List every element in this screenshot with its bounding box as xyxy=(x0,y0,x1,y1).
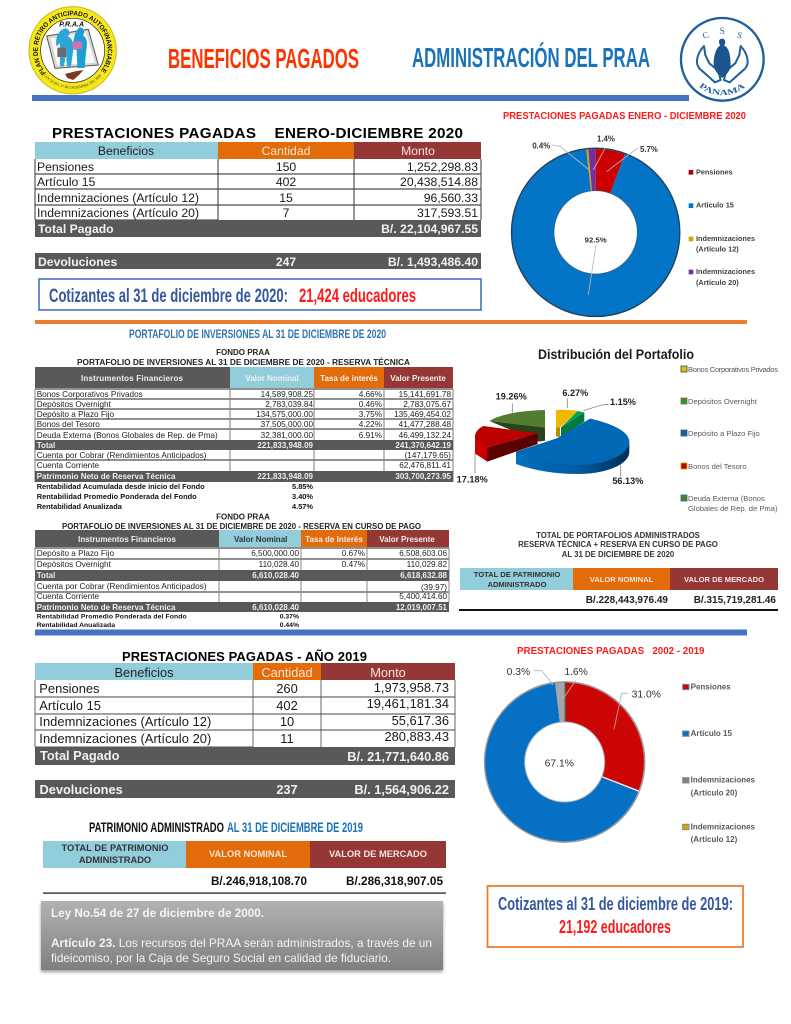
heading: table benefits 2019: PRESTACIONES PAGADAS - AÑO 2019 xyxy=(122,649,367,664)
table: reserva en curso de pago: Cuenta Corriente xyxy=(37,592,99,601)
callout: cotizantes 2020: 21,424 educadores xyxy=(299,286,416,307)
donut chart: prestaciones 2020: 92.5% xyxy=(585,236,607,245)
text box: ley 54: Ley No.54 de 27 de diciembre de 2000. xyxy=(51,907,264,920)
heading: donut 2020: PRESTACIONES PAGADAS ENERO - DICIEMBRE 2020 xyxy=(503,110,746,122)
legend: donut 2002-2019: Indemnizaciones xyxy=(691,776,756,785)
callout: cotizantes 2019 xyxy=(488,886,743,947)
table: patrimonio 2019: TOTAL DE PATRIMONIO xyxy=(62,843,168,853)
table: benefits 2020: 15 xyxy=(279,191,293,205)
table: benefits 2019: 1,973,958.73 xyxy=(374,680,449,695)
legend: donut 2020 xyxy=(689,167,755,287)
table: reserva tecnica: 241,370,642.19 xyxy=(395,441,452,450)
table: benefits 2020: Indemnizaciones (Artículo 20) xyxy=(37,206,199,220)
donut chart: prestaciones 2002-2019: 0.3% xyxy=(507,667,530,678)
row: devoluciones 2019: Devoluciones xyxy=(40,782,123,797)
table: reserva en curso de pago: 6,610,028.40 xyxy=(252,571,300,580)
table: reserva tecnica: 32,381,000.00 xyxy=(261,431,313,440)
table: benefits 2019: 10 xyxy=(280,714,294,729)
donut chart: prestaciones 2020 xyxy=(512,135,680,316)
text: rentabilidad curso de pago xyxy=(37,614,299,629)
table: patrimonio 2019: B/.286,318,907.05 xyxy=(346,876,444,888)
heading: total de portafolios administrados: AL 31 DE DICIEMBRE DE 2020 xyxy=(562,550,675,559)
logo: CSS Panama: S xyxy=(736,30,744,41)
table: reserva tecnica: 62,476,811.41 xyxy=(399,461,451,470)
logo: CSS Panama xyxy=(680,16,765,102)
donut chart: prestaciones 2020: 5.7% xyxy=(640,145,658,154)
heading: distribucion del portafolio: Distribución del Portafolio xyxy=(538,347,694,362)
row: devoluciones 2019: B/. 1,564,906.22 xyxy=(354,782,449,797)
table: reserva tecnica: 0.46% xyxy=(359,400,382,409)
table: patrimonio 2019: B/.246,918,108.70 xyxy=(211,876,307,888)
legend: donut 2020: (Artículo 20) xyxy=(696,278,739,287)
heading: table benefits 2020: PRESTACIONES PAGADAS ENERO-DICIEMBRE 2020 xyxy=(52,125,463,142)
3D pie chart: distribucion del portafolio: 6.27% xyxy=(562,388,588,398)
text: rentabilidad curso de pago: Rentabilidad Promedio Ponderada del Fondo xyxy=(37,614,187,620)
legend: distribucion del portafolio: Bonos del Tesoro xyxy=(688,462,747,471)
table: reserva tecnica: 221,833,948.09 xyxy=(257,472,314,481)
table: benefits 2019: 260 xyxy=(276,681,298,696)
logo: PRAA: PLAN DE RETIRO ANTICIPADO AUTOFINANCIABLE xyxy=(33,10,112,76)
row: devoluciones 2019 xyxy=(35,780,455,798)
table: benefits 2020: 7 xyxy=(283,206,290,220)
table: benefits 2019: 11 xyxy=(280,731,294,746)
table: reserva tecnica: Cuenta por Cobrar (Rendimientos Anticipados) xyxy=(37,451,207,460)
table: reserva tecnica: Patrimonio Neto de Reserva Técnica xyxy=(37,472,176,481)
table: reserva tecnica: 2,783,039.84 xyxy=(265,400,313,409)
table: reserva en curso de pago: Valor Nominal xyxy=(234,535,287,544)
table: reserva en curso de pago: 5,400,414.60 xyxy=(399,592,447,601)
table: patrimonio 2019 xyxy=(43,841,446,894)
table: total patrimonio 2020: VALOR DE MERCADO xyxy=(684,575,764,584)
text: rentabilidad reserva tecnica: Rentabilidad Anualizada xyxy=(37,502,123,511)
table: benefits 2020: 96,560.33 xyxy=(424,191,478,205)
text: rentabilidad curso de pago: 0.37% xyxy=(280,614,299,620)
heading: total de portafolios administrados: RESERVA TÉCNICA + RESERVA EN CURSO DE PAGO xyxy=(518,540,718,549)
table: reserva en curso de pago: Patrimonio Neto de Reserva Técnica xyxy=(37,603,176,612)
table: reserva tecnica: 3.75% xyxy=(359,410,382,419)
table: reserva en curso de pago: 0.67% xyxy=(342,549,365,558)
table: total patrimonio 2020: VALOR NOMINAL xyxy=(590,575,654,584)
table: benefits 2020: B/. 22,104,967.55 xyxy=(381,222,478,236)
table: reserva tecnica: 134,575,000.00 xyxy=(256,410,313,419)
table: reserva en curso de pago: Tasa de Interés xyxy=(305,535,363,544)
text box: ley 54: fideicomiso, por la Caja de Seguro Social en calidad de fiduciario. xyxy=(51,952,391,965)
donut chart: prestaciones 2002-2019 xyxy=(485,667,661,842)
text: rentabilidad reserva tecnica: 4.57% xyxy=(292,502,313,511)
table: reserva tecnica: 41,477,288.48 xyxy=(399,420,451,429)
table: benefits 2020: Beneficios xyxy=(98,144,154,158)
table: reserva en curso de pago: Depósito a Plazo Fijo xyxy=(37,549,115,558)
legend: donut 2020: Pensiones xyxy=(696,167,733,176)
logo: PRAA: LEY 54 DEL 27 DE DICIEMBRE DEL 2000 xyxy=(44,74,101,89)
table: total patrimonio 2020: ADMINISTRADO xyxy=(487,580,547,589)
table: benefits 2019: Artículo 15 xyxy=(39,698,101,713)
heading: total de portafolios administrados xyxy=(518,531,718,559)
table: benefits 2020: Total Pagado xyxy=(38,222,114,236)
callout: cotizantes 2019: 21,192 educadores xyxy=(559,917,671,937)
table: reserva tecnica: 46,499,132.24 xyxy=(399,431,451,440)
table: reserva tecnica: 15,141,691.78 xyxy=(399,390,451,399)
logo: CSS Panama: C xyxy=(701,29,710,41)
logo: CSS Panama: S xyxy=(720,26,725,36)
text: rentabilidad curso de pago: 0.44% xyxy=(280,622,299,629)
legend: donut 2002-2019 xyxy=(683,682,756,844)
table: reserva tecnica: 135,469,454.02 xyxy=(394,410,451,419)
legend: donut 2002-2019: (Artículo 20) xyxy=(691,788,738,797)
heading: reserva tecnica: PORTAFOLIO DE INVERSIONES AL 31 DE DICIEMBRE DE 2020 - RESERVA TÉCNICA xyxy=(77,358,410,367)
legend: distribucion del portafolio: Globales de Rep. de Pma) xyxy=(688,504,778,513)
table: benefits 2019: Indemnizaciones (Artículo 12) xyxy=(39,714,211,729)
legend: donut 2002-2019: (Artículo 12) xyxy=(691,835,738,844)
text: rentabilidad curso de pago: Rentabilidad Anualizada xyxy=(37,622,115,629)
heading: total de portafolios administrados: TOTAL DE PORTAFOLIOS ADMINISTRADOS xyxy=(536,531,700,540)
logo: PRAA xyxy=(28,6,117,94)
3D pie chart: distribucion del portafolio: 56.13% xyxy=(612,476,643,486)
table: reserva tecnica: 4.22% xyxy=(359,420,382,429)
legend: donut 2020: (Artículo 12) xyxy=(696,245,739,254)
3D pie chart: distribucion del portafolio: 19.26% xyxy=(496,391,527,401)
text: rentabilidad reserva tecnica xyxy=(37,482,313,511)
table: reserva tecnica: Tasa de interés xyxy=(320,374,378,383)
table: reserva en curso de pago: Instrumentos Financieros xyxy=(78,535,176,544)
table: benefits 2019: 402 xyxy=(276,698,298,713)
legend: distribucion del portafolio: Bonos Corporativos Privados xyxy=(688,365,778,374)
table: reserva en curso de pago: Cuenta por Cobrar (Rendimientos Anticipados) xyxy=(37,582,207,591)
heading: reserva en curso de pago: FONDO PRAA xyxy=(216,512,270,522)
legend: distribucion del portafolio: Deuda Externa (Bonos xyxy=(688,494,765,503)
table: benefits 2020: Cantidad xyxy=(262,144,310,158)
table: benefits 2020: 1,252,298.83 xyxy=(407,160,478,174)
table: reserva tecnica: Depósito a Plazo Fijo xyxy=(37,410,115,419)
table: benefits 2020: Indemnizaciones (Artículo 12) xyxy=(37,191,199,205)
table: benefits 2019: Cantidad xyxy=(261,665,313,680)
text: rentabilidad reserva tecnica: Rentabilidad Acumulada desde inicio del Fondo xyxy=(37,482,205,491)
table: reserva en curso de pago: Depósitos Overnight xyxy=(37,560,112,569)
table: reserva en curso de pago: 6,508,603.06 xyxy=(399,549,447,558)
table: reserva en curso de pago: 12,019,007.51 xyxy=(396,603,448,612)
table: reserva tecnica: Deuda Externa (Bonos Globales de Rep. de Pma) xyxy=(37,431,218,440)
table: benefits 2019: Monto xyxy=(370,665,406,680)
table: benefits 2019: 55,617.36 xyxy=(392,713,449,728)
donut chart: prestaciones 2020: 0.4% xyxy=(532,141,550,150)
text: rentabilidad reserva tecnica: 5.85% xyxy=(292,482,313,491)
table: reserva tecnica: Instrumentos Financieros xyxy=(81,374,184,383)
logo: CSS Panama: PANAMA xyxy=(699,82,746,96)
table: reserva tecnica: 37,505,000.00 xyxy=(261,420,313,429)
title: Beneficios Pagados: BENEFICIOS PAGADOS xyxy=(168,43,359,74)
legend: donut 2020: Artículo 15 xyxy=(696,201,734,210)
table: patrimonio 2019: ADMINISTRADO xyxy=(79,855,151,865)
heading: patrimonio administrado 2019: PATRIMONIO ADMINISTRADO xyxy=(89,819,224,835)
table: reserva tecnica: Cuenta Corriente xyxy=(37,461,99,470)
table: benefits 2020: 150 xyxy=(276,160,296,174)
table: patrimonio 2019: VALOR DE MERCADO xyxy=(329,849,427,859)
table: benefits 2019: 19,461,181.34 xyxy=(367,696,449,711)
table: reserva tecnica: 14,589,908.25 xyxy=(261,390,313,399)
table: benefits 2019: Beneficios xyxy=(114,665,174,680)
table: reserva tecnica: Valor Presente xyxy=(390,374,446,383)
table: total patrimonio 2020: B/.228,443,976.49 xyxy=(586,595,668,606)
table: reserva tecnica: 221,833,948.09 xyxy=(257,441,314,450)
3D pie chart: distribucion del portafolio: 17.18% xyxy=(457,475,488,485)
legend: distribucion del portafolio: Depósito a Plazo Fijo xyxy=(688,429,760,438)
donut chart: prestaciones 2002-2019: 1.6% xyxy=(564,667,588,678)
table: reserva tecnica: Depósitos Overnight xyxy=(37,400,112,409)
legend: donut 2002-2019: Artículo 15 xyxy=(691,729,732,738)
row: devoluciones 2020: 247 xyxy=(276,255,296,269)
legend: distribucion del portafolio xyxy=(681,365,778,513)
table: reserva en curso de pago: 0.47% xyxy=(342,560,365,569)
table: total patrimonio 2020: B/.315,719,281.46 xyxy=(694,595,776,606)
table: benefits 2020: Monto xyxy=(401,144,435,158)
table: reserva tecnica: (147,179.65) xyxy=(405,451,451,460)
table: benefits 2019 xyxy=(35,663,455,765)
table: reserva en curso de pago: 110,028.40 xyxy=(259,560,299,569)
row: devoluciones 2020 xyxy=(35,253,481,269)
table: reserva tecnica: 303,700,273.95 xyxy=(395,472,452,481)
text box: ley 54: Artículo 23. Los recursos del PRAA serán administrados, a través de un xyxy=(51,937,432,950)
row: devoluciones 2020: Devoluciones xyxy=(38,255,117,269)
heading: portafolio: PORTAFOLIO DE INVERSIONES AL 31 DE DICIEMBRE DE 2020 xyxy=(129,327,386,341)
table: benefits 2020: Artículo 15 xyxy=(37,175,95,189)
table: benefits 2020: Pensiones xyxy=(37,160,94,174)
table: reserva tecnica: Bonos Corporativos Privados xyxy=(37,390,143,399)
table: benefits 2020: 317,593.51 xyxy=(417,206,478,220)
table: reserva en curso de pago: 6,500,000.00 xyxy=(251,549,299,558)
table: total patrimonio 2020: TOTAL DE PATRIMONIO xyxy=(474,570,560,579)
table: reserva en curso de pago: 110,029.82 xyxy=(407,560,447,569)
table: reserva en curso de pago: Valor Presente xyxy=(379,535,435,544)
table: reserva tecnica: Bonos del Tesoro xyxy=(37,420,100,429)
legend: donut 2002-2019: Pensiones xyxy=(691,682,731,691)
table: benefits 2019: Indemnizaciones (Artículo 20) xyxy=(39,731,211,746)
donut chart: prestaciones 2002-2019: 31.0% xyxy=(632,690,661,701)
donut chart: prestaciones 2020: 1.4% xyxy=(597,135,615,144)
table: reserva tecnica: Valor Nominal xyxy=(245,374,299,383)
table: reserva en curso de pago: Total xyxy=(37,571,55,580)
legend: donut 2020: Indemnizaciones xyxy=(696,234,755,243)
text box: ley 54 xyxy=(41,901,443,970)
table: reserva tecnica: 4.66% xyxy=(359,390,382,399)
table: benefits 2019: 280,883.43 xyxy=(384,729,449,744)
table: reserva tecnica xyxy=(35,367,453,482)
row: devoluciones 2020: B/. 1,493,486.40 xyxy=(388,255,478,269)
table: benefits 2019: B/. 21,771,640.86 xyxy=(347,749,449,764)
heading: reserva en curso de pago: PORTAFOLIO DE INVERSIONES AL 31 DE DICIEMBRE DE 2020 - RESERVA EN CURSO DE PAGO xyxy=(62,522,421,531)
table: reserva en curso de pago: (39.97) xyxy=(421,583,447,592)
table: benefits 2020: 402 xyxy=(276,175,296,189)
table: reserva tecnica: Total xyxy=(37,441,55,450)
3D pie chart: distribucion del portafolio xyxy=(457,388,643,486)
title: Administración del PRAA: ADMINISTRACIÓN DEL PRAA xyxy=(412,42,650,73)
heading: donut 2002-2019: PRESTACIONES PAGADAS 2002 - 2019 xyxy=(517,645,705,657)
text: rentabilidad reserva tecnica: Rentabilidad Promedio Ponderada del Fondo xyxy=(37,492,197,501)
callout: cotizantes 2020: Cotizantes al 31 de diciembre de 2020: xyxy=(49,286,288,307)
table: benefits 2019: Total Pagado xyxy=(40,748,120,763)
heading: reserva en curso de pago xyxy=(62,512,421,531)
legend: donut 2020: Indemnizaciones xyxy=(696,267,755,276)
heading: reserva tecnica xyxy=(77,348,410,367)
table: benefits 2020 xyxy=(35,142,481,237)
table: reserva en curso de pago: 6,610,028.40 xyxy=(252,603,300,612)
table: benefits 2019: Pensiones xyxy=(39,681,100,696)
heading: reserva tecnica: FONDO PRAA xyxy=(216,348,270,357)
table: reserva en curso de pago: 6,618,632.88 xyxy=(400,571,448,580)
logo: PRAA: P.R.A.A xyxy=(59,22,84,29)
legend: donut 2002-2019: Indemnizaciones xyxy=(691,822,756,831)
table: patrimonio 2019: VALOR NOMINAL xyxy=(209,849,287,859)
callout: cotizantes 2020 xyxy=(39,279,481,310)
table: total patrimonio 2020 xyxy=(459,568,778,611)
table: benefits 2020: 20,438,514.88 xyxy=(400,175,478,189)
heading: patrimonio administrado 2019: AL 31 DE DICIEMBRE DE 2019 xyxy=(227,819,363,835)
row: devoluciones 2019: 237 xyxy=(276,782,298,797)
3D pie chart: distribucion del portafolio: 1.15% xyxy=(610,397,636,407)
table: reserva tecnica: 6.91% xyxy=(359,431,382,440)
donut chart: prestaciones 2002-2019: 67.1% xyxy=(545,758,574,769)
table: reserva tecnica: 2,783,075.67 xyxy=(403,400,451,409)
text: rentabilidad reserva tecnica: 3.40% xyxy=(292,492,313,501)
table: reserva en curso de pago xyxy=(35,530,449,612)
legend: distribucion del portafolio: Depósitos Overnight xyxy=(688,397,758,406)
